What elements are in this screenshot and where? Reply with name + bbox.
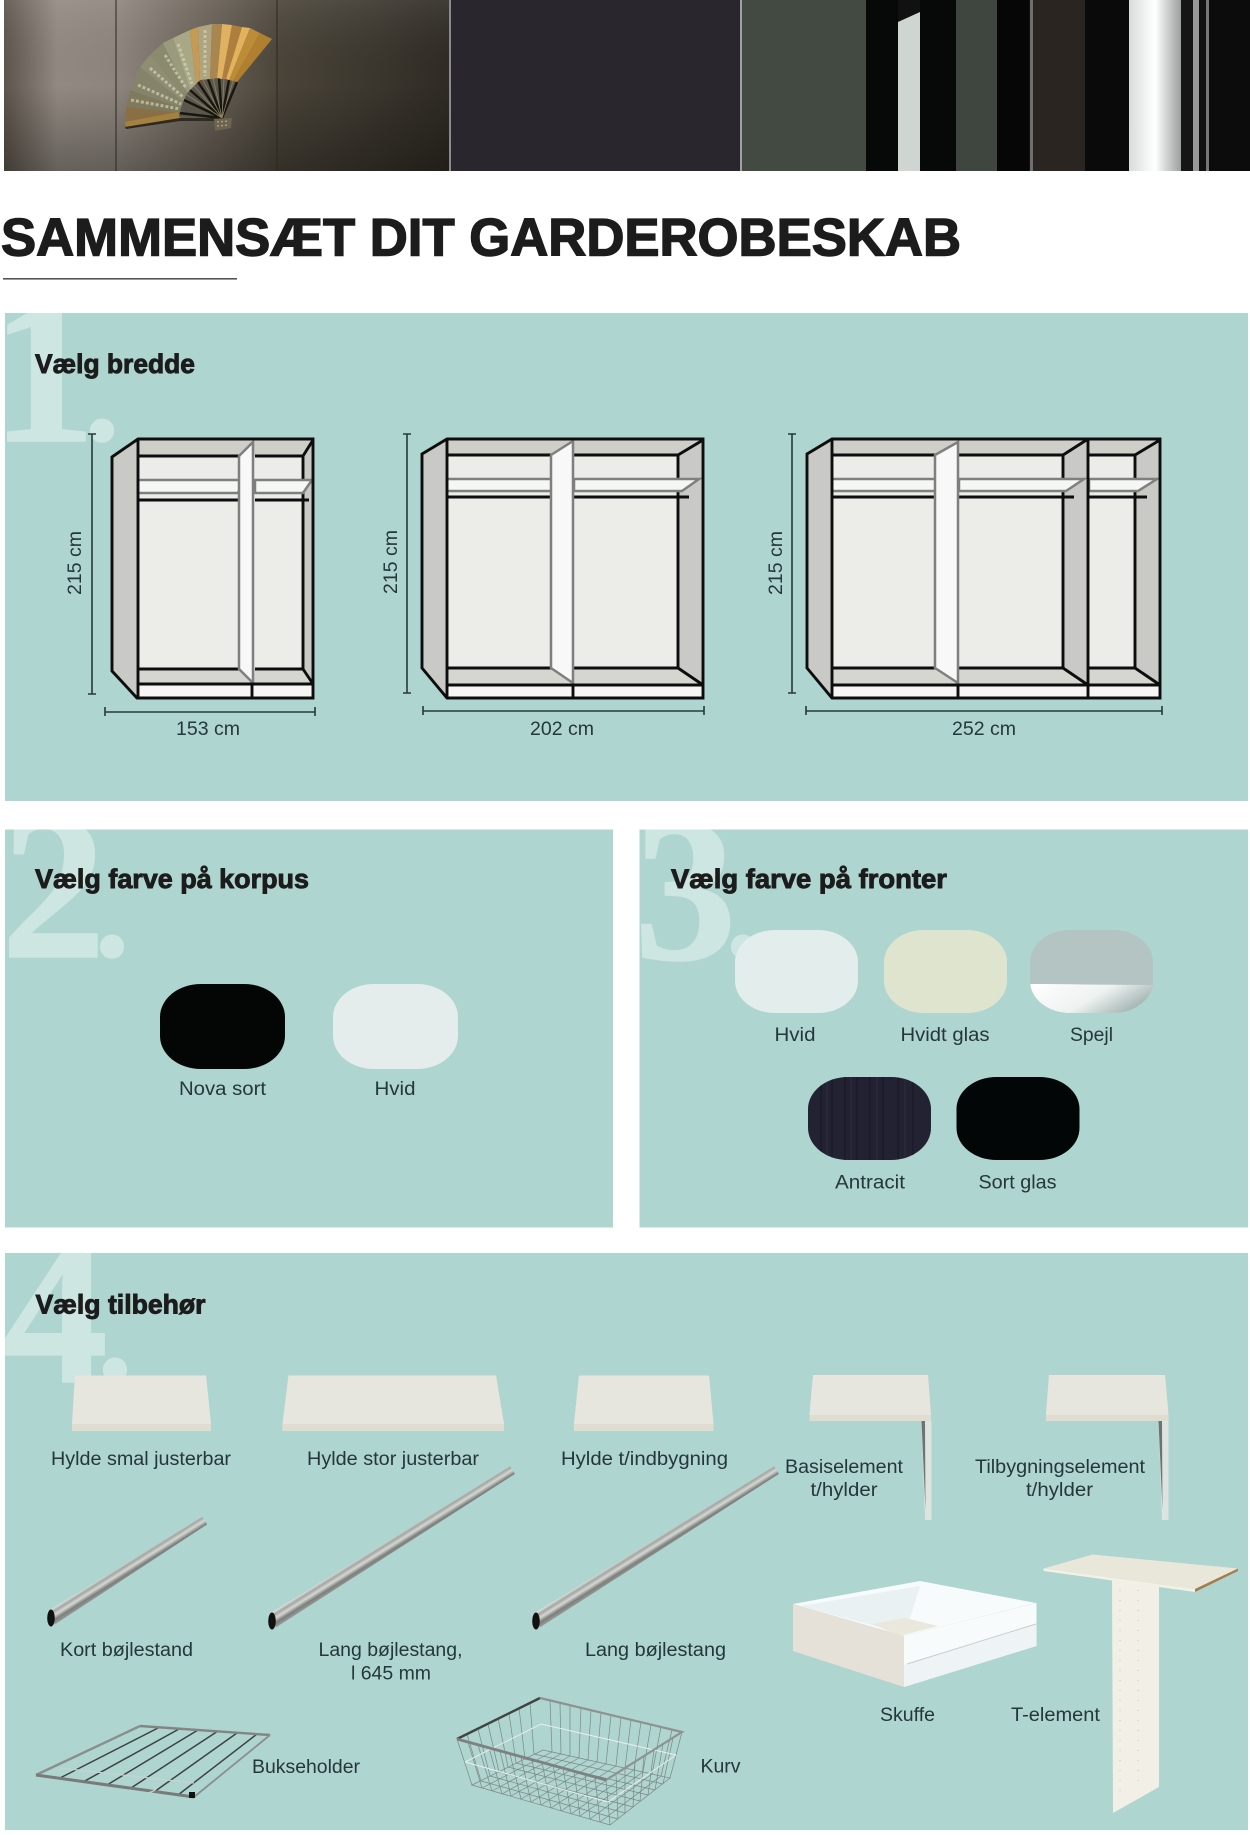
big number 2: 2 (1, 771, 106, 1003)
heading: Vælg tilbehør: Vælg tilbehør (36, 1290, 206, 1320)
panel: 4 accessories (3, 1196, 1248, 1830)
accessory: Hylde stor justerbar (282, 1376, 504, 1470)
accessory: Skuffe drawer: Skuffe (880, 1705, 935, 1726)
swatch: Antracit (808, 1077, 931, 1194)
dimension: width 153 cm (105, 707, 315, 740)
title underline (3, 278, 237, 280)
swatch: Hvid (735, 930, 858, 1046)
dimension: width 252 cm: 252 cm (952, 719, 1016, 740)
dimension: height 215 cm (766, 434, 796, 693)
accessory: Tilbygningselement t/hylder (975, 1375, 1168, 1520)
dimension: height 215 cm: 215 cm (766, 531, 787, 595)
swatch: Spejl (1030, 930, 1153, 1046)
big number 4: 4 (3, 1196, 108, 1428)
big number 3 (641, 830, 750, 962)
swatch: Nova sort (160, 984, 285, 1100)
heading: Vælg farve på korpus: Vælg farve på korpus (35, 864, 309, 894)
swatch: Spejl: Spejl (1070, 1025, 1113, 1046)
accessory: Kort bøjlestand: Kort bøjlestand (60, 1640, 193, 1661)
wardrobe 252 cm (807, 439, 1160, 698)
big number 4 (5, 1253, 127, 1383)
accessory: Bukseholder trouser rack (36, 1726, 361, 1798)
accessory: Lang bøjlestang: Lang bøjlestang (585, 1640, 726, 1661)
swatch: Hvidt glas: Hvidt glas (900, 1025, 990, 1046)
title: SAMMENSÆT DIT GARDEROBESKAB (1, 208, 961, 268)
swatch: Hvid (333, 984, 458, 1100)
swatch: Hvidt glas (884, 930, 1007, 1046)
icon: decorative fan (125, 24, 272, 131)
accessory: Tilbygningselement t/hylder: t/hylder (1026, 1480, 1094, 1501)
swatch: Sort glas (956, 1077, 1080, 1194)
accessory: Lang bøjlestang, l 645 mm (268, 1464, 517, 1684)
swatch: Hvid: Hvid (374, 1079, 416, 1100)
big number 1 (7, 313, 114, 443)
wardrobe 202 cm (422, 439, 703, 698)
heading: Vælg farve på fronter: Vælg farve på fronter (671, 864, 947, 894)
accessory: Bukseholder trouser rack: Bukseholder (252, 1757, 361, 1778)
dimension: width 202 cm: 202 cm (530, 719, 594, 740)
accessory: Basiselement t/hylder (785, 1375, 932, 1520)
dimension: width 202 cm (423, 706, 704, 740)
big number 3: 3 (634, 777, 736, 1004)
dimension: height 215 cm (381, 434, 411, 693)
accessory: Lang bøjlestang (532, 1464, 781, 1661)
swatch: Hvid: Hvid (774, 1025, 816, 1046)
accessory: Hylde smal justerbar (51, 1376, 232, 1470)
accessory: Hylde t/indbygning: Hylde t/indbygning (561, 1449, 728, 1470)
dimension: width 252 cm (806, 706, 1162, 740)
big number 1: . (84, 316, 120, 471)
big number 3: . (726, 832, 760, 987)
panel: 1 choose width (5, 313, 1248, 801)
accessory: Kurv wire basket (457, 1698, 741, 1825)
accessory: Lang bøjlestang, l 645 mm: Lang bøjlestang, (318, 1640, 462, 1661)
accessory: T-element (1011, 1554, 1238, 1813)
accessory: Hylde t/indbygning (561, 1376, 728, 1470)
swatch: Antracit: Antracit (835, 1172, 906, 1194)
accessory: Basiselement t/hylder: t/hylder (810, 1480, 878, 1501)
accessory: Hylde stor justerbar: Hylde stor justerbar (307, 1449, 480, 1470)
accessory: Hylde smal justerbar: Hylde smal justerbar (51, 1449, 232, 1470)
big number 2: . (94, 832, 130, 987)
accessory: Basiselement t/hylder: Basiselement (785, 1457, 904, 1478)
accessory: Lang bøjlestang, l 645 mm: l 645 mm (351, 1664, 431, 1684)
heading: Vælg bredde: Vælg bredde (35, 349, 195, 379)
wardrobe 153 cm (112, 439, 313, 698)
dimension: height 215 cm: 215 cm (65, 531, 86, 595)
big number 4: . (98, 1255, 132, 1410)
accessory: Skuffe drawer (793, 1581, 1036, 1726)
dimension: height 215 cm: 215 cm (381, 530, 402, 594)
dimension: height 215 cm (65, 434, 96, 694)
accessory: Kort bøjlestand (47, 1515, 209, 1661)
panel: 3 front colour (640, 830, 1248, 1228)
photo banner (4, 0, 1250, 171)
swatch: Nova sort: Nova sort (179, 1079, 267, 1100)
dimension: width 153 cm: 153 cm (176, 719, 240, 740)
panel: 2 carcass colour (5, 830, 613, 1228)
accessory: Kurv wire basket: Kurv (700, 1756, 741, 1778)
accessory: T-element: T-element (1011, 1705, 1101, 1726)
swatch: Sort glas: Sort glas (978, 1172, 1056, 1194)
accessory: Tilbygningselement t/hylder: Tilbygningselement (975, 1457, 1146, 1478)
big number 2 (9, 830, 124, 959)
